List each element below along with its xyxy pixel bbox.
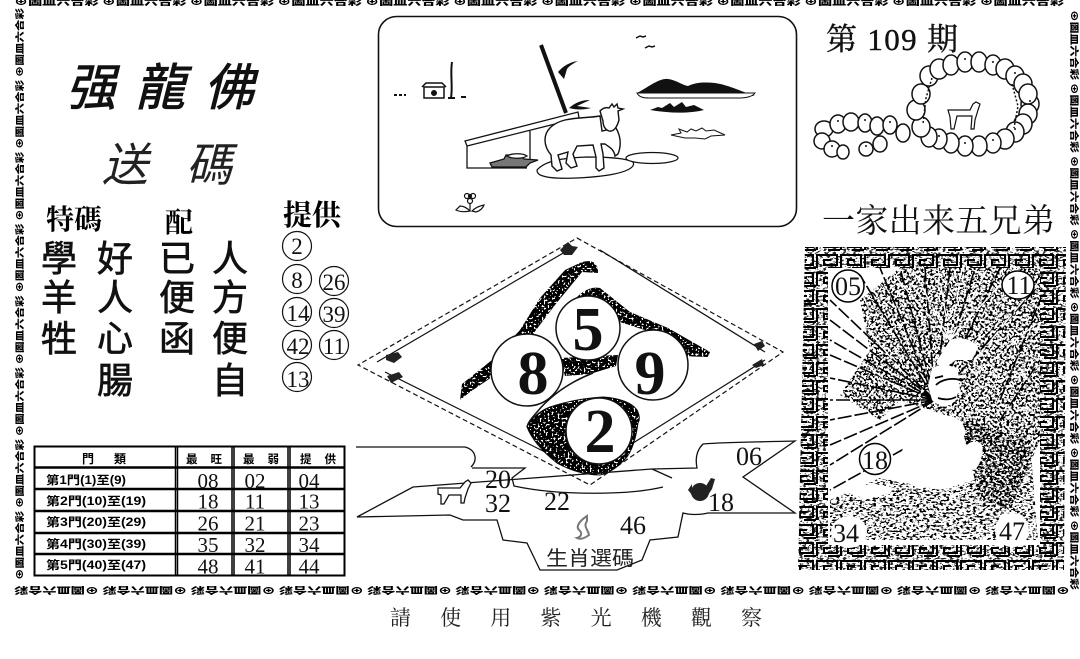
heading: match: 配	[165, 207, 193, 239]
icon: distant hut and tree	[394, 62, 466, 98]
digit 8: 8	[518, 340, 548, 408]
provided number circles: 26	[322, 270, 346, 295]
ink swirl bottom	[527, 397, 639, 475]
issue number heading: 第 109 期	[826, 22, 958, 57]
digit 2: 2	[584, 398, 616, 466]
door number table	[34, 446, 345, 578]
provided number circles: 39	[322, 302, 346, 327]
bottom border strip: ⊕圖皿六合彩 ⊕圖皿六合彩 ⊕圖皿六合彩 ⊕圖皿六合彩 ⊕圖皿六合彩 ⊕圖皿六合彩 ⊕圖皿六合彩 ⊕圖皿六合彩 ⊕圖皿六合彩 ⊕圖皿六合彩 ⊕圖皿六合彩 ⊕圖皿六合彩	[14, 584, 1070, 597]
subtitle calligraphy: 送碼	[102, 139, 262, 191]
snake icon	[577, 516, 589, 539]
verse columns: 便	[159, 269, 195, 321]
door number table: 提 供	[300, 452, 336, 466]
curved line	[527, 373, 593, 427]
panel: portrait with meander frame	[798, 247, 1066, 570]
digit 5: 5	[572, 296, 604, 364]
heading: special code: 特碼	[46, 204, 102, 236]
door number table: 18	[198, 490, 218, 514]
corner ornaments	[386, 242, 765, 383]
footer note: 請使用紫光機觀察	[390, 606, 762, 630]
verse columns: 學	[41, 230, 77, 282]
number circles: 47	[999, 517, 1025, 546]
verse columns: 羊	[41, 269, 77, 321]
ribbon banner	[356, 441, 795, 570]
door number table: 最 旺	[186, 453, 222, 466]
door number table: 02	[244, 469, 266, 493]
rooster icon	[688, 478, 715, 501]
provided number circles: 11	[323, 334, 345, 359]
door number table: 最 弱	[243, 453, 279, 466]
goat icon	[438, 480, 471, 504]
verse columns: 自	[212, 352, 248, 404]
halo dark texture	[840, 268, 1040, 510]
verse columns: 牲	[41, 310, 77, 362]
door number table: 第1門(1)至(9)	[46, 473, 126, 487]
door number table: 第4門(30)至(39)	[46, 537, 146, 551]
door number table: 13	[298, 490, 320, 514]
verse columns: 便	[212, 310, 248, 362]
door number table: 32	[244, 533, 266, 557]
door number table: 41	[244, 554, 266, 578]
inner diamond outline	[377, 250, 765, 452]
number circles: 34	[833, 519, 859, 548]
icon: mountains	[637, 79, 755, 139]
digit 5	[556, 296, 620, 364]
diamond: lucky digits	[358, 238, 783, 485]
verse columns: 好	[97, 230, 133, 282]
door number table: 08	[198, 469, 218, 493]
provided number circles: 8	[291, 268, 303, 293]
sun rays	[830, 268, 1040, 490]
digit 8	[491, 334, 563, 408]
door number table: 第2門(10)至(19)	[46, 494, 146, 508]
verse columns: 函	[159, 310, 195, 362]
door number table: 第3門(20)至(29)	[46, 515, 146, 529]
provided number circles: 2	[291, 234, 303, 259]
ribbon caption: 生肖選碼	[546, 547, 634, 570]
door number table: 門 類	[82, 451, 126, 466]
ink stroke upper left	[460, 261, 598, 400]
number circles	[831, 270, 1034, 548]
number circles: 11	[1006, 271, 1032, 300]
verse columns: 人	[212, 230, 248, 282]
number circles: 05	[835, 272, 861, 301]
left border strip: ⊕圖皿六合彩 ⊕圖皿六合彩 ⊕圖皿六合彩 ⊕圖皿六合彩 ⊕圖皿六合彩 ⊕圖皿六合彩 ⊕圖皿六合彩 ⊕圖皿六合彩	[13, 8, 26, 580]
ribbon numbers	[485, 442, 762, 540]
provided number circles: 14	[286, 301, 310, 326]
provided number circles: 13	[286, 367, 310, 392]
verse columns: 方	[212, 269, 248, 321]
door number table: 26	[198, 512, 218, 536]
door number table: 44	[298, 554, 320, 578]
door number table: 23	[298, 512, 320, 536]
door number table: 第5門(40)至(47)	[46, 558, 146, 572]
icon: bead ring with goat	[814, 52, 1039, 159]
icon: fence and stones	[465, 112, 579, 168]
verse columns: 已	[159, 230, 195, 282]
verse columns: 心	[97, 310, 133, 362]
title calligraphy: 强龍佛	[66, 60, 274, 116]
digit 9: 9	[634, 340, 666, 408]
digit 2	[566, 398, 632, 466]
ribbon numbers: 46	[620, 511, 646, 540]
icon: birds	[636, 36, 655, 48]
door number table: 21	[244, 512, 266, 536]
figure body	[897, 415, 965, 489]
icon: flower	[456, 194, 484, 212]
number circles: 18	[862, 446, 888, 475]
figure head	[936, 338, 978, 370]
door number table: 48	[198, 554, 218, 578]
ribbon outline	[356, 441, 795, 570]
dashed diamond outline	[358, 238, 783, 485]
ribbon numbers: 22	[544, 487, 570, 516]
meander frame	[798, 247, 1066, 570]
icon: ground rocks	[537, 152, 678, 178]
verse columns	[41, 230, 248, 404]
heading: provided: 提供	[283, 198, 343, 232]
verse columns: 人	[97, 269, 133, 321]
verse columns: 腸	[97, 352, 133, 404]
icon: bamboo	[541, 45, 591, 113]
ribbon numbers: 18	[708, 488, 734, 517]
door number table: 35	[198, 533, 218, 557]
provided number circles	[282, 232, 348, 392]
icon: goat	[545, 104, 623, 171]
ribbon numbers: 06	[736, 442, 762, 471]
white ray streaks	[845, 268, 1040, 410]
five brothers heading: 一家出来五兄弟	[822, 203, 1055, 240]
panel: goat scene	[378, 16, 796, 226]
provided number circles: 42	[286, 334, 310, 359]
door number table: 11	[245, 490, 265, 514]
ribbon numbers: 20	[485, 465, 511, 494]
ink patch middle	[560, 355, 618, 376]
door number table: 04	[298, 469, 320, 493]
robe texture	[830, 420, 1038, 540]
ink stroke upper right	[570, 288, 710, 357]
ribbon numbers: 32	[485, 489, 511, 518]
door number table: 34	[298, 533, 320, 557]
digit 9	[618, 330, 688, 408]
